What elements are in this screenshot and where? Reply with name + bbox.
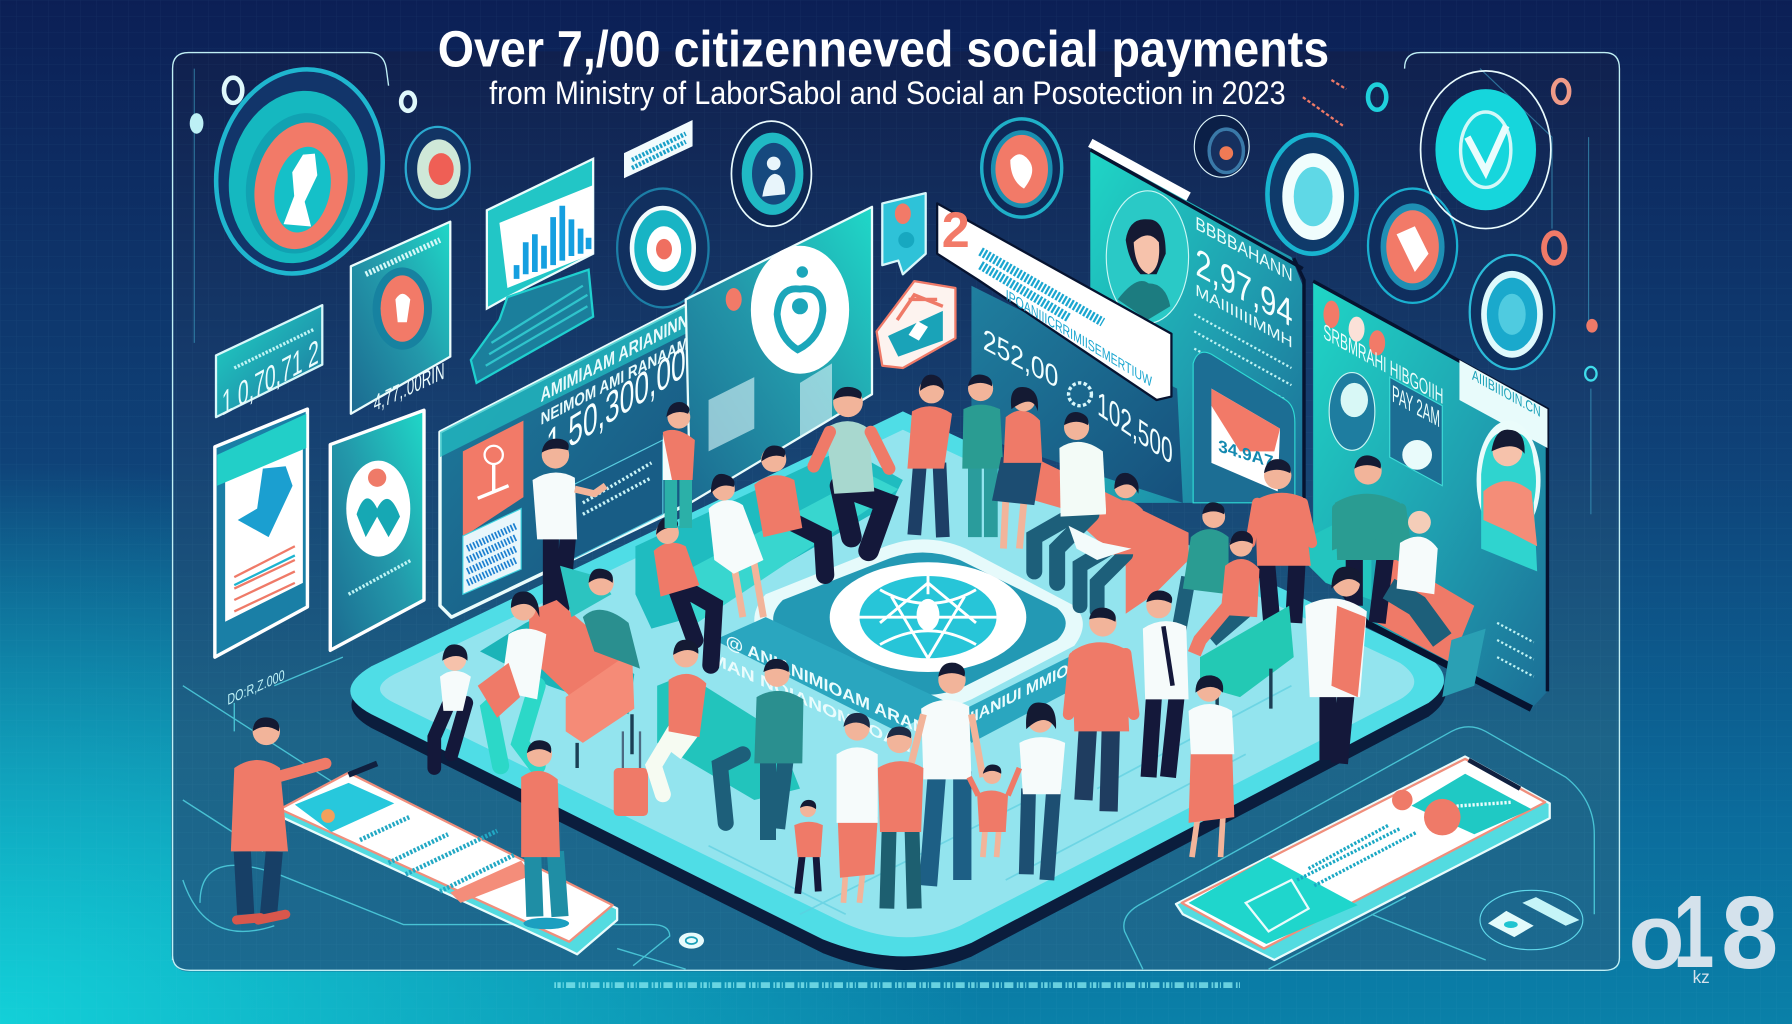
person: man white shirt standing bbox=[533, 439, 606, 623]
striped base bbox=[471, 270, 593, 383]
icon: globe bbox=[859, 576, 997, 658]
subtitle: from Ministry of LaborSabol and Social an Posotection in 2023 bbox=[489, 75, 1286, 111]
sofa: panel coral bbox=[1377, 549, 1474, 663]
card: amount left: 1 0,70,71 2 bbox=[222, 332, 319, 423]
panel: chat bubble icon bbox=[882, 193, 926, 274]
person: girl white bbox=[434, 644, 471, 768]
panel: heart bbox=[686, 207, 872, 503]
medallion: large check bbox=[1421, 71, 1551, 229]
person: woman coral with laptop bbox=[1069, 473, 1143, 611]
person: man coral standing right bbox=[1250, 459, 1312, 651]
icon: hand heart bbox=[238, 466, 293, 537]
small rings right bbox=[1303, 80, 1598, 381]
person: man teal seated behind chair bbox=[583, 569, 640, 669]
card: coral badge: 4,77,.00RIN bbox=[374, 358, 445, 417]
phone: left upper bbox=[215, 409, 307, 657]
icon: flower medallion center bbox=[617, 189, 709, 307]
panel: right payment: SRBMRAHI HIBGOIIH bbox=[1323, 319, 1443, 409]
floor text band right: IIIANIUI MMIO bbox=[966, 660, 1069, 729]
floor text band left bbox=[711, 617, 949, 757]
icon: cash bottom right bbox=[1480, 890, 1583, 950]
white banner: IPOANIIICRRIMIISEMERTIUW bbox=[1006, 287, 1153, 391]
medallion: dark oval bbox=[1194, 115, 1249, 177]
panel: right payment: AIIIBIIIOIN.CN bbox=[1472, 367, 1541, 421]
person: man white family bbox=[905, 663, 983, 886]
chair: teal armchair bbox=[1200, 606, 1294, 726]
panel: woman portrait: 2,97,94 bbox=[1195, 239, 1293, 336]
person: seated woman white bbox=[709, 474, 763, 617]
QR code bbox=[463, 509, 521, 594]
icon: flower medallion bbox=[406, 127, 470, 209]
person: woman coral seated middle bbox=[654, 640, 706, 794]
label: bottom left caption: DO:R,Z.000 bbox=[227, 667, 285, 709]
person: man white tie bbox=[1143, 591, 1189, 777]
icon: bottom circle badge bbox=[679, 933, 704, 949]
icon: house bbox=[877, 281, 955, 368]
logo: o bbox=[1629, 886, 1684, 988]
panel: woman portrait: 34.9A7 bbox=[1218, 436, 1274, 472]
white banner bbox=[937, 201, 1183, 503]
envelope card bbox=[1193, 352, 1295, 503]
floor text band left: MAN NOIANOMOOAN bbox=[711, 649, 911, 757]
icon: small ring top left bbox=[190, 78, 415, 134]
person: seated woman coral bbox=[654, 517, 714, 665]
panel: large amount: 1 50,300,00 bbox=[546, 337, 686, 472]
panel: woman portrait bbox=[1090, 143, 1304, 503]
person: couple seated right bbox=[1177, 502, 1259, 654]
person: small child bbox=[794, 800, 823, 894]
floor platform bbox=[350, 411, 1446, 970]
teal sofa middle bbox=[657, 674, 800, 800]
number two badge: 2 bbox=[942, 201, 970, 258]
person: boy coral family bbox=[878, 727, 923, 909]
phone: bottom right bbox=[1176, 757, 1550, 960]
panel: woman portrait: MAIIIIIIIMMH bbox=[1195, 280, 1293, 352]
person: woman white coral skirt bbox=[1189, 675, 1234, 857]
label: white tag bbox=[624, 120, 693, 178]
sofa: far right teal bbox=[1309, 520, 1371, 600]
person: man white seated bbox=[1034, 412, 1106, 583]
person: child coral right bbox=[969, 764, 1019, 857]
icon: portrait medallion bbox=[731, 121, 811, 226]
person: woman coral at panel bbox=[663, 402, 695, 528]
phone: family bbox=[330, 410, 424, 650]
medallion: cyan ring right bbox=[1470, 255, 1554, 369]
person: woman white on coral chair bbox=[478, 591, 546, 766]
sofas back row bbox=[635, 448, 1474, 663]
sofa: right coral bbox=[1031, 459, 1189, 614]
panel: large amount: NEIMOM AMI RANAAM bbox=[541, 333, 688, 429]
person: man coral standing center bbox=[1069, 608, 1134, 811]
bar chart bbox=[517, 206, 589, 279]
title: Over 7,/00 citizenneved social payments bbox=[438, 19, 1329, 77]
person: woman white family bbox=[837, 713, 878, 903]
person: seated woman in panel bbox=[1389, 511, 1486, 697]
person: woman coral apron bbox=[907, 375, 952, 537]
chart panel bbox=[471, 159, 593, 383]
card: coral badge bbox=[351, 222, 450, 417]
panel: large amount bbox=[440, 303, 690, 617]
panel: right payment bbox=[1313, 281, 1547, 709]
phone: bottom left bbox=[274, 763, 617, 954]
sofa: coral chair left bbox=[480, 566, 634, 768]
person: woman white center right bbox=[1019, 703, 1065, 880]
person: man coral on phone far left bbox=[231, 717, 326, 920]
barcode strip bbox=[554, 983, 1240, 988]
medallion: coral hands bbox=[1368, 189, 1457, 303]
person: man seated grey bbox=[814, 387, 889, 551]
card: amount left bbox=[216, 305, 322, 423]
person: woman white phone bbox=[1305, 567, 1367, 763]
person: woman coral dark skirt bbox=[992, 387, 1042, 549]
floor text band left: @ ANIANIMIOAM ARAN bbox=[726, 630, 926, 740]
icon: coral badge bbox=[463, 421, 523, 537]
medallion: cyan globe bbox=[1267, 135, 1357, 254]
panel: woman portrait: BBBBAHANN bbox=[1195, 213, 1293, 287]
luggage bbox=[614, 731, 648, 816]
person: seated woman coral back row bbox=[754, 445, 825, 575]
person: man teal bbox=[962, 375, 1003, 537]
panel: large amount: AMIMIAAM ARIANINN bbox=[541, 309, 688, 407]
white banner: 102,500 bbox=[1097, 384, 1173, 473]
person: man coral standing on phone bbox=[521, 740, 569, 929]
emblem bbox=[754, 539, 1083, 710]
person: man teal standing right bbox=[1335, 455, 1406, 623]
panel: right payment: PAY 2AM bbox=[1392, 381, 1440, 433]
white banner: 252,00 bbox=[983, 321, 1058, 395]
floor text band right bbox=[954, 657, 1080, 743]
logo: 8 bbox=[1721, 875, 1778, 990]
title bbox=[438, 19, 1329, 111]
medallion: coral top center bbox=[982, 119, 1062, 217]
logo suffix: kz bbox=[1693, 967, 1710, 987]
logo: 1 bbox=[1673, 874, 1714, 989]
icon: large coral ring bbox=[198, 54, 401, 289]
person: man teal standing middle bbox=[720, 659, 803, 840]
logo bbox=[1629, 874, 1778, 990]
main frame bbox=[171, 51, 1621, 971]
circuit lines bottom bbox=[183, 657, 1594, 969]
